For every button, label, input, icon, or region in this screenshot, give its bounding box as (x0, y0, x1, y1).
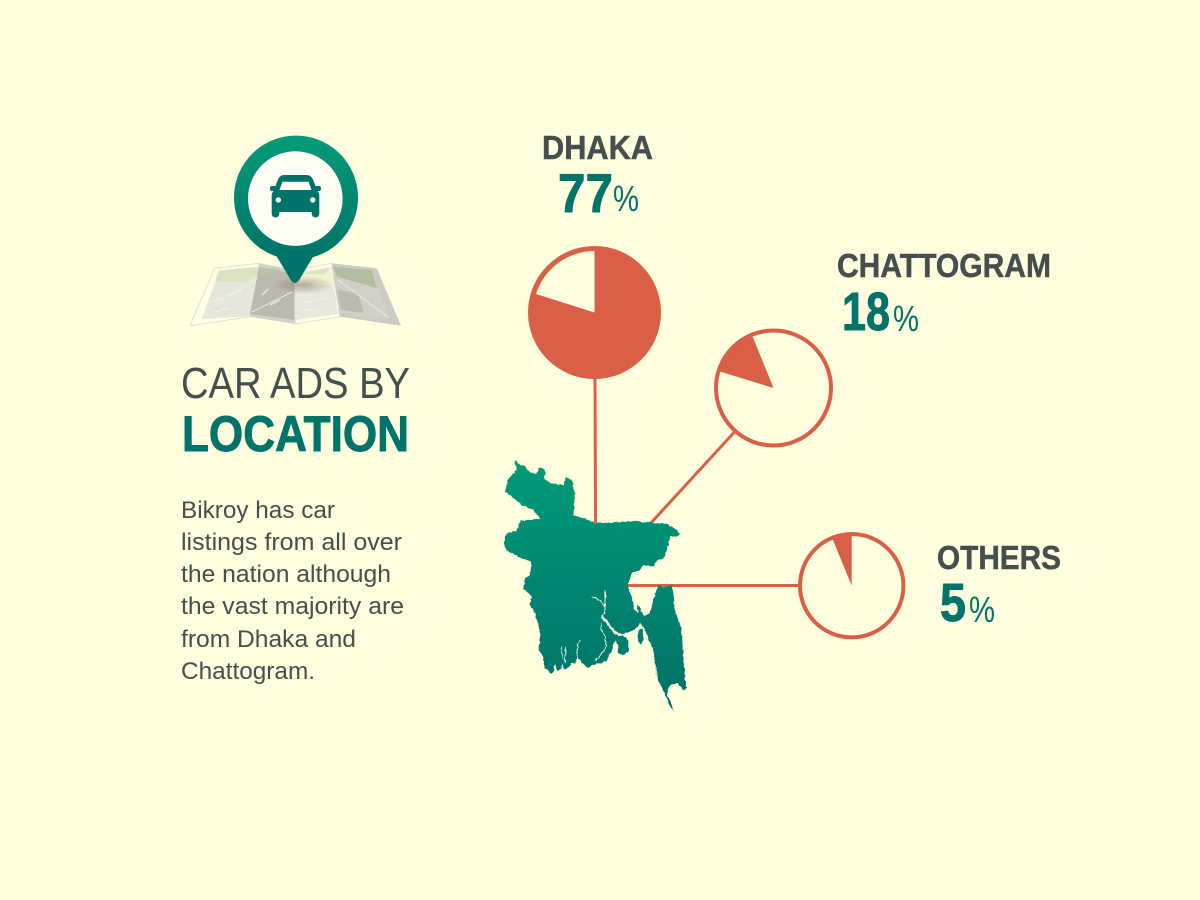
label: Dhaka 77% (542, 129, 653, 224)
heading: car ads by location (181, 359, 410, 462)
label: Others 5%: OTHERS (937, 539, 1061, 576)
connector line: Dhaka (594, 378, 597, 523)
heading: car ads by location: LOCATION (182, 406, 409, 462)
text block: description: listings from all over (181, 529, 402, 556)
icon: map pin shadow (273, 276, 333, 294)
text block: description: Chattogram. (181, 658, 315, 685)
connector line: Chattogram (650, 432, 734, 524)
pie chart: Chattogram 18% (716, 330, 831, 446)
pie chart: Others 5% (800, 534, 903, 637)
label: Others 5%: 5 (940, 573, 966, 633)
label: Chattogram 18% (837, 247, 1051, 342)
label: Dhaka 77%: 77 (558, 162, 613, 224)
map: Bangladesh (503, 459, 687, 712)
label: Chattogram 18%: CHATTOGRAM (837, 247, 1051, 284)
pie chart: Dhaka 77% (528, 246, 661, 379)
text block: description: Bikroy has car (181, 497, 335, 524)
icon: car (270, 175, 321, 217)
label: Chattogram 18%: % (893, 298, 919, 339)
label: Others 5%: % (969, 589, 995, 630)
label: Others 5% (937, 539, 1061, 633)
label: Dhaka 77%: % (613, 178, 639, 219)
heading: car ads by location: CAR ADS BY (181, 359, 410, 408)
text block: description: the nation although (181, 561, 391, 588)
label: Chattogram 18%: 18 (842, 282, 890, 342)
icon: folded map (190, 263, 401, 326)
text block: description: the vast majority are (181, 593, 404, 620)
icon: location pin with car (234, 136, 358, 283)
label: Dhaka 77%: DHAKA (542, 129, 653, 166)
text block: description: from Dhaka and (181, 626, 356, 653)
text block: description (181, 497, 404, 685)
connector line: Others (627, 584, 799, 587)
